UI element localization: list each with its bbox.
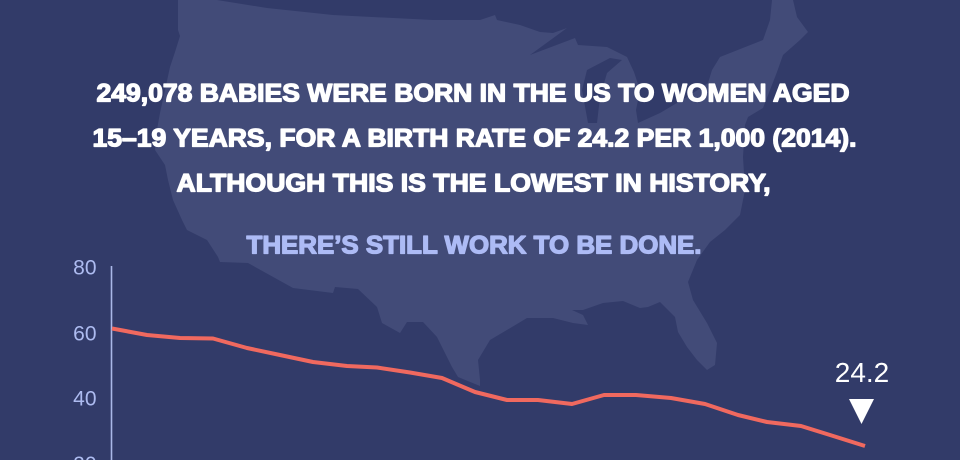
heading statement: ALTHOUGH THIS IS THE LOWEST IN HISTORY, xyxy=(176,170,770,198)
heading statement: 249,078 BABIES WERE BORN IN THE US TO WOMEN AGED xyxy=(96,80,850,108)
heading statement xyxy=(92,80,856,198)
y axis labels: 80 xyxy=(73,256,96,280)
value label: 24.2 xyxy=(835,357,889,388)
highlighted statement: THERE’S STILL WORK TO BE DONE. xyxy=(246,232,702,260)
y axis line xyxy=(110,266,112,460)
y axis labels: 60 xyxy=(73,322,96,346)
heading statement: 15–19 YEARS, FOR A BIRTH RATE OF 24.2 PER 1,000 (2014). xyxy=(92,124,856,152)
y axis labels xyxy=(73,256,96,460)
lake Michigan xyxy=(582,58,622,123)
map: contiguous United States silhouette xyxy=(155,0,808,386)
y axis labels: 40 xyxy=(73,388,96,410)
icon: pointer triangle xyxy=(849,399,874,424)
chart: birth rate line chart xyxy=(73,256,889,460)
birth rate trend line xyxy=(112,328,865,446)
